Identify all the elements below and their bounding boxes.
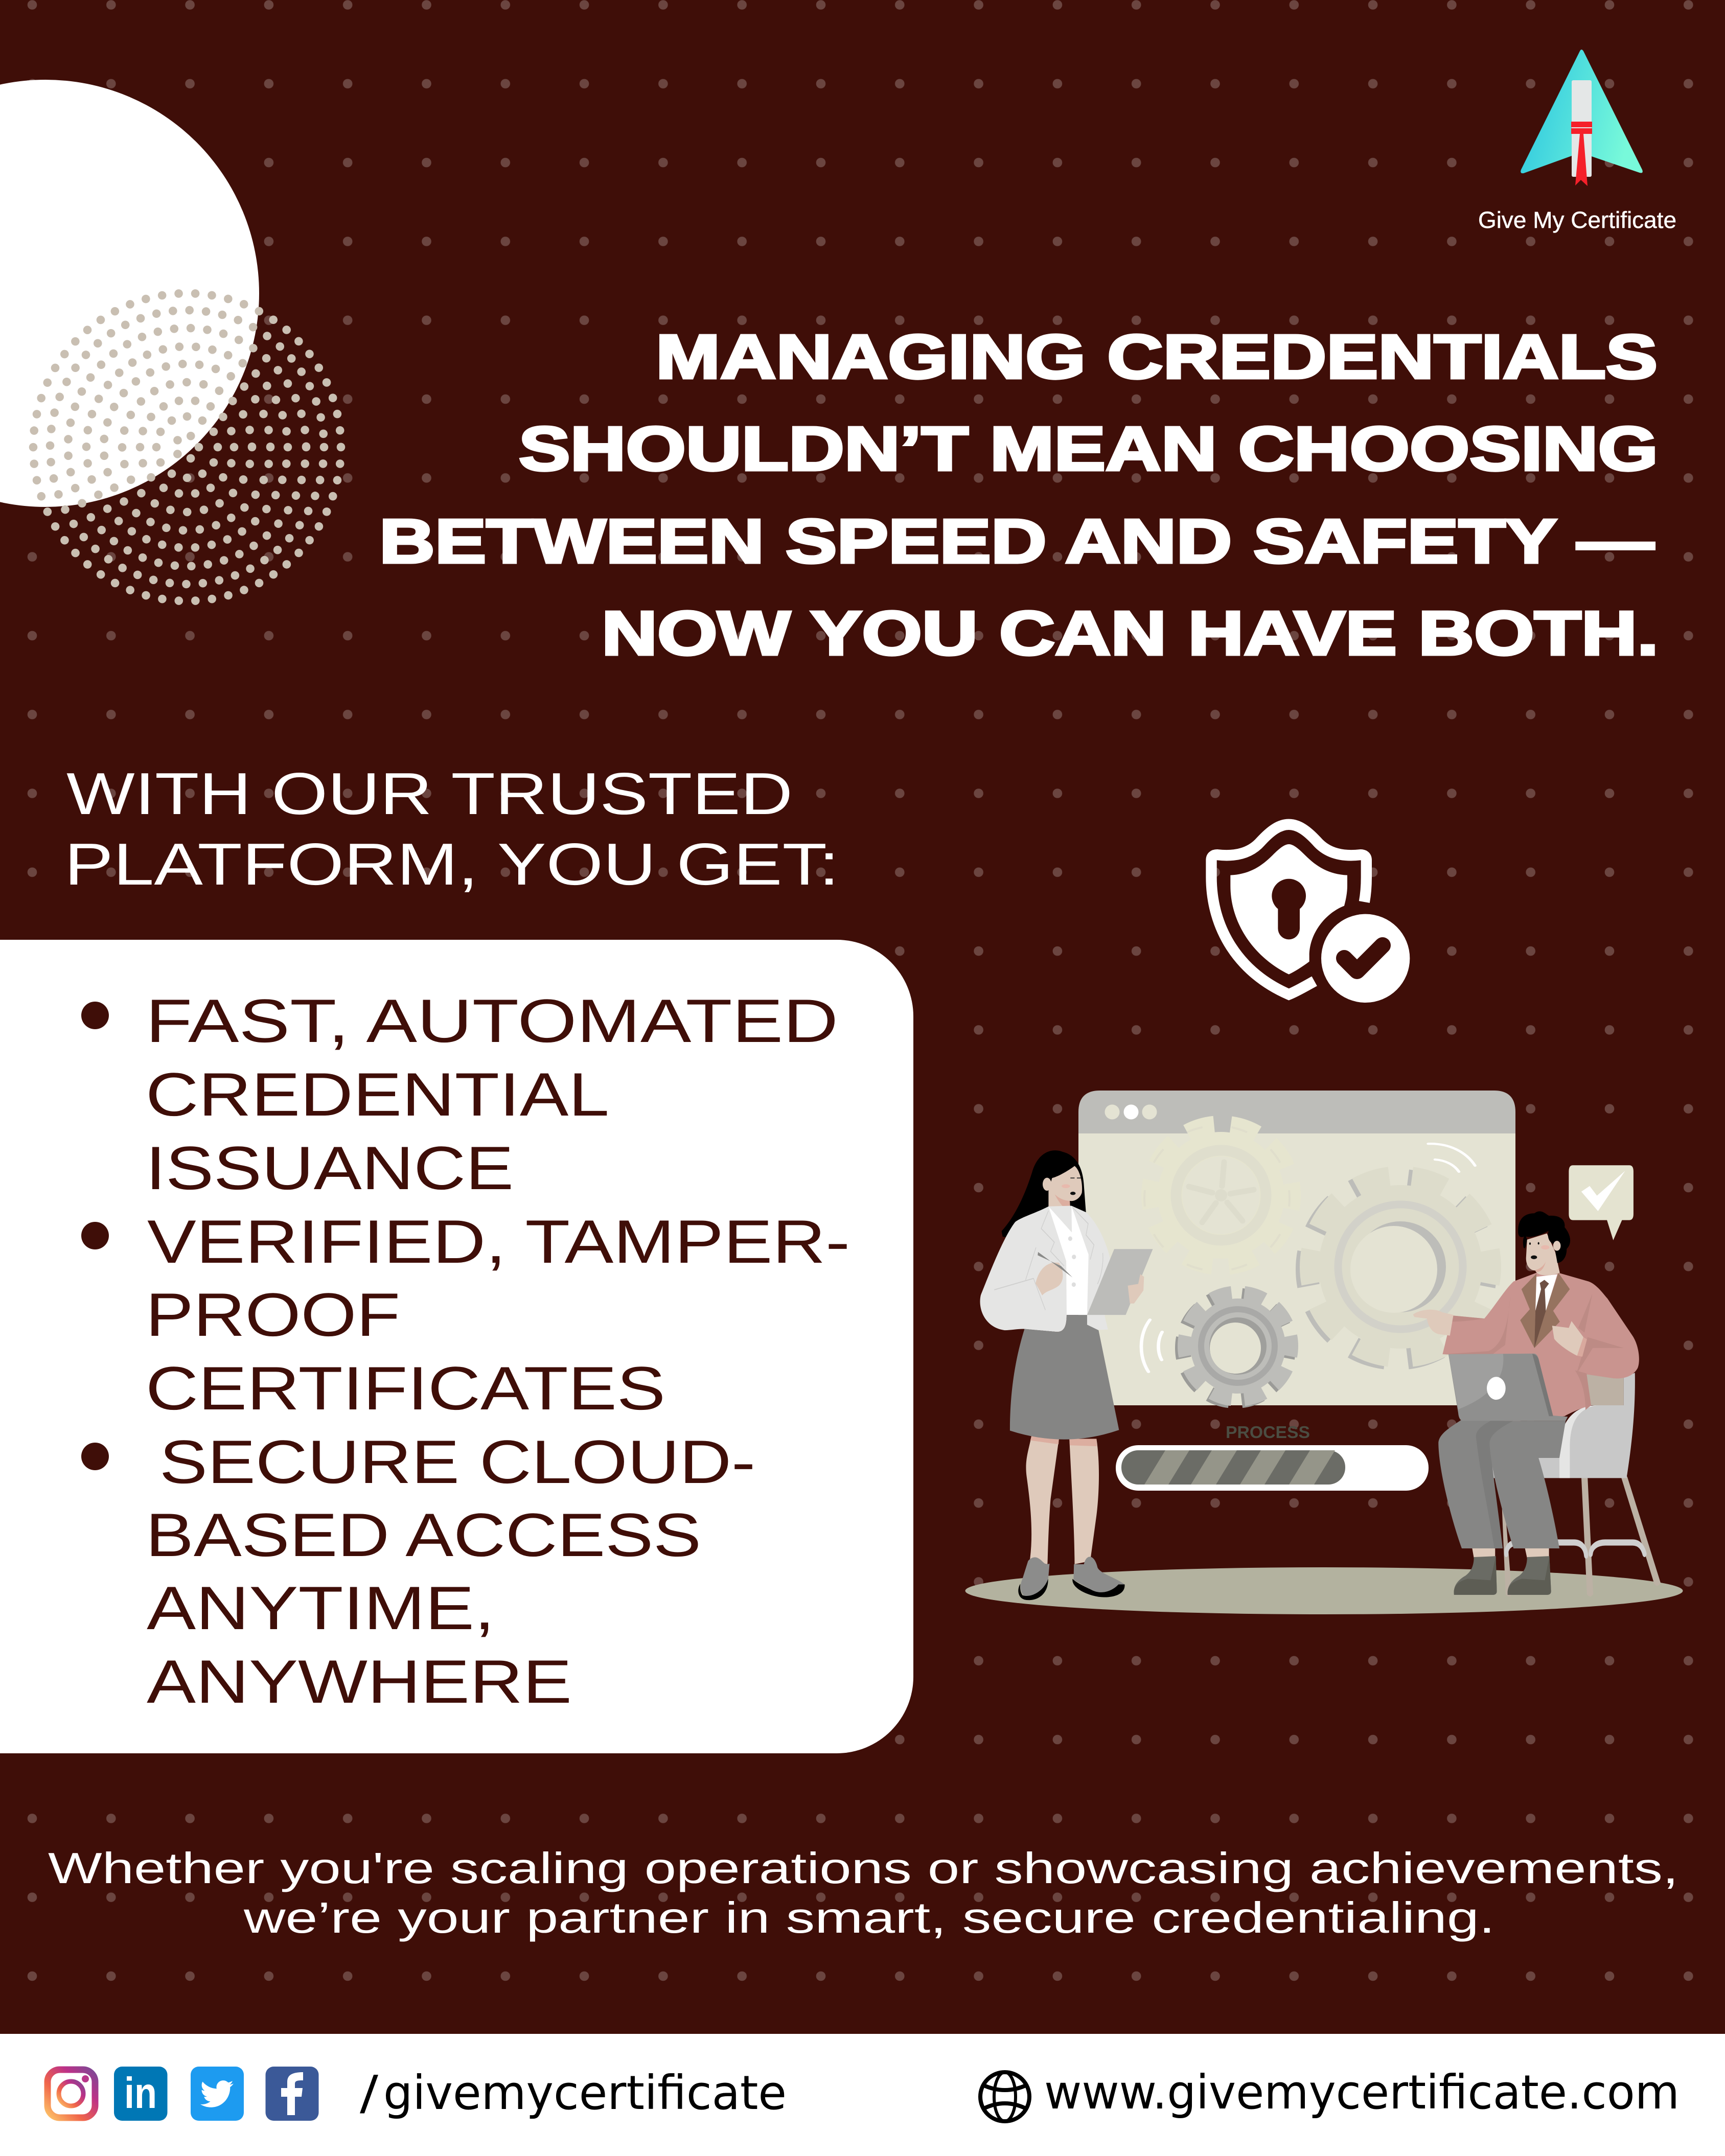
bullet markers — [81, 1002, 109, 1470]
window title bar — [1078, 1091, 1515, 1133]
benefits text: FAST, AUTOMATED — [146, 987, 838, 1055]
hair — [1518, 1211, 1570, 1263]
panel background — [0, 940, 913, 1753]
icon: linkedin: in — [124, 2069, 157, 2118]
jacket lines — [994, 1208, 1103, 1310]
logo wordmark: Give My Certificate — [1478, 207, 1676, 233]
chair seat — [1486, 1458, 1559, 1478]
main heading: SHOULDN’T MEAN CHOOSING — [519, 414, 1658, 483]
trousers front leg — [1489, 1421, 1566, 1548]
benefits text: ANYTIME, — [147, 1574, 495, 1642]
logo arrow — [1521, 50, 1643, 173]
small gear — [1183, 1293, 1291, 1401]
left sole — [1018, 1579, 1048, 1600]
face details — [1529, 1241, 1560, 1272]
subheading: PLATFORM, YOU GET: — [64, 831, 839, 897]
benefits text — [146, 987, 850, 1716]
faded gear — [1144, 1125, 1291, 1271]
main heading: NOW YOU CAN HAVE BOTH. — [602, 598, 1659, 668]
chair back and arm — [1559, 1373, 1635, 1478]
progress track — [1116, 1445, 1429, 1491]
shield inner — [1230, 844, 1347, 975]
icon: linkedin — [114, 2067, 168, 2121]
large gear — [1307, 1177, 1490, 1359]
laptop — [1448, 1354, 1568, 1421]
trousers rear leg — [1438, 1420, 1505, 1548]
writing hand — [1036, 1263, 1063, 1295]
chair cushion — [1586, 1374, 1624, 1405]
benefits text: CERTIFICATES — [146, 1354, 665, 1423]
shirt buttons — [1068, 1236, 1076, 1287]
benefits text: BASED ACCESS — [146, 1501, 701, 1569]
shirt — [1048, 1205, 1089, 1315]
motion arcs — [1141, 1144, 1475, 1372]
website address: www.givemycertificate.com — [1044, 2065, 1680, 2120]
icon: facebook — [266, 2067, 319, 2121]
tie — [1534, 1280, 1549, 1348]
keyhole — [1272, 879, 1306, 939]
footer background — [0, 2034, 1725, 2156]
progress fill — [1121, 1450, 1345, 1485]
trousers shade — [1476, 1421, 1513, 1548]
tablet — [1087, 1249, 1153, 1315]
benefits text: ANYWHERE — [147, 1648, 572, 1716]
main heading: BETWEEN SPEED AND SAFETY — — [379, 506, 1654, 576]
footer bar — [0, 2034, 1725, 2156]
closing statement: we’re your partner in smart, secure credentialing. — [243, 1894, 1495, 1942]
speech bubble with check — [1569, 1165, 1634, 1240]
ankles — [1472, 1548, 1549, 1558]
gesturing hand — [1552, 1321, 1583, 1356]
neck and face — [1048, 1166, 1082, 1232]
check badge — [1321, 914, 1410, 1003]
shirt — [1535, 1274, 1557, 1311]
cuff — [1577, 1337, 1587, 1357]
icon: globe — [980, 2072, 1029, 2121]
social handle: givemycertificate — [383, 2066, 787, 2120]
right sole — [1072, 1579, 1125, 1597]
person: woman with tablet — [980, 1150, 1153, 1600]
pointing hand — [1413, 1310, 1454, 1336]
left shoe — [1021, 1557, 1049, 1597]
neck and head — [1526, 1234, 1560, 1276]
benefits text: PROOF — [146, 1281, 400, 1349]
benefits text: SECURE CLOUD- — [159, 1428, 755, 1496]
holding hand — [1128, 1274, 1144, 1304]
right shoe — [1073, 1557, 1124, 1592]
knee shadows — [1030, 1436, 1097, 1446]
logo ribbon — [1571, 122, 1592, 186]
closing statement — [48, 1844, 1678, 1942]
jacket — [980, 1205, 1110, 1332]
chair foot bars — [1506, 1542, 1645, 1556]
ear — [1043, 1178, 1051, 1191]
illustration: team process scene — [965, 1091, 1683, 1614]
shield outline — [1211, 824, 1366, 994]
legs — [1026, 1436, 1099, 1564]
main heading: MANAGING CREDENTIALS — [656, 322, 1658, 391]
bubble — [1569, 1165, 1634, 1240]
icon: twitter — [191, 2067, 244, 2121]
social handle: / — [360, 2066, 378, 2120]
progress bar — [1116, 1445, 1429, 1491]
ground ellipse — [965, 1567, 1683, 1614]
lapels — [1520, 1273, 1570, 1348]
check mark — [1344, 945, 1383, 971]
progress stripes — [1144, 1450, 1335, 1485]
jacket shading — [1442, 1294, 1624, 1410]
window body — [1078, 1133, 1515, 1405]
chair legs — [1502, 1476, 1661, 1596]
chair highlight — [1559, 1405, 1597, 1478]
shoe shading — [1454, 1556, 1551, 1595]
closing statement: Whether you're scaling operations or showcasing achievements, — [48, 1844, 1678, 1893]
left shoe — [1454, 1556, 1497, 1595]
decorative circle with dotted halftone — [0, 80, 341, 601]
logo scroll — [1572, 80, 1592, 177]
main heading — [379, 322, 1659, 668]
process label: PROCESS — [1226, 1423, 1310, 1442]
browser window — [1078, 1091, 1515, 1405]
benefits text: ISSUANCE — [146, 1134, 514, 1202]
window buttons — [1105, 1105, 1157, 1119]
subheading — [64, 760, 839, 897]
right shoe — [1508, 1556, 1551, 1595]
subheading: WITH OUR TRUSTED — [66, 760, 793, 827]
check mark — [1581, 1171, 1625, 1211]
benefits text: VERIFIED, TAMPER- — [147, 1208, 850, 1276]
face details — [1055, 1178, 1081, 1211]
person: man with laptop on chair — [1413, 1211, 1661, 1596]
pen — [1038, 1252, 1072, 1278]
logo: Give My Certificate — [1478, 50, 1676, 233]
icon: shield with keyhole and check — [1211, 824, 1410, 1003]
panel: benefits list — [0, 940, 913, 1753]
white circle — [0, 80, 259, 507]
benefits text: CREDENTIAL — [146, 1060, 609, 1129]
icon: instagram — [48, 2070, 95, 2118]
hair — [1002, 1150, 1086, 1238]
skirt — [1010, 1315, 1119, 1440]
halftone concentric dots — [33, 293, 341, 601]
jacket — [1442, 1273, 1639, 1422]
